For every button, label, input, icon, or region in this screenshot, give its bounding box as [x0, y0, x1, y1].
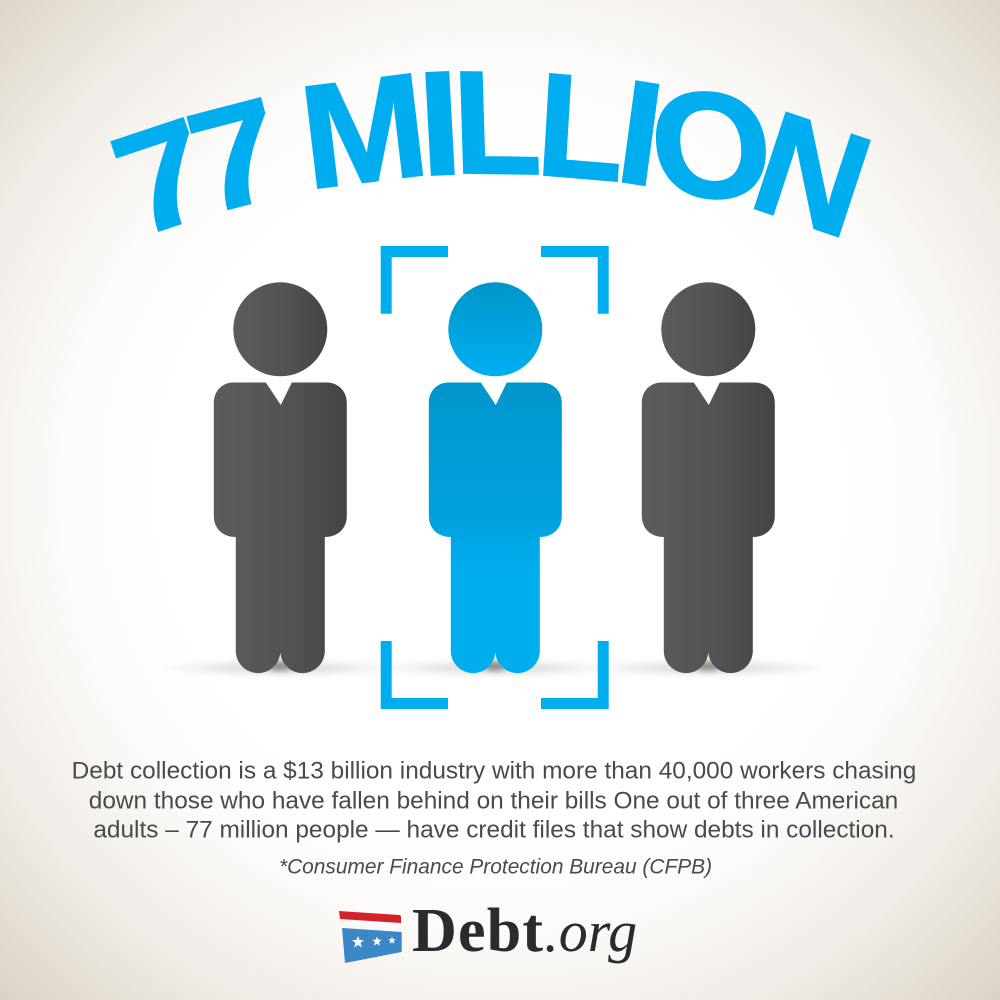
title: 77 MILLION: 7: [173, 67, 300, 245]
person: center blue highlighted: [429, 282, 562, 673]
title: 77 MILLION: I: [608, 49, 673, 219]
logo: Debt.org: [339, 897, 637, 965]
source citation: *Consumer Finance Protection Bureau (CFPB): [279, 856, 712, 878]
title: 77 MILLION: M: [292, 41, 436, 221]
title: 77 MILLION: N: [735, 80, 889, 270]
selection brackets: [386, 252, 603, 704]
title: 77 MILLION: L: [450, 40, 543, 205]
title: 77 MILLION: 7: [95, 87, 232, 268]
description text: adults – 77 million people — have credit files that show debts in collection.: [93, 817, 895, 844]
person: left gray: [214, 282, 347, 673]
title: 77 MILLION: [95, 39, 889, 270]
person: right gray: [642, 282, 775, 673]
title: 77 MILLION: L: [533, 42, 629, 213]
icon: flag: [339, 911, 402, 963]
title: 77 MILLION: O: [645, 60, 777, 232]
description text: down those who have fallen behind on their bills One out of three American: [89, 787, 898, 814]
description text: [72, 758, 916, 844]
description text: Debt collection is a $13 billion industry with more than 40,000 workers chasing: [72, 758, 916, 785]
wordmark: Debt.org: [412, 897, 637, 965]
ground shadows: [155, 659, 833, 677]
title: 77 MILLION: I: [414, 39, 466, 207]
